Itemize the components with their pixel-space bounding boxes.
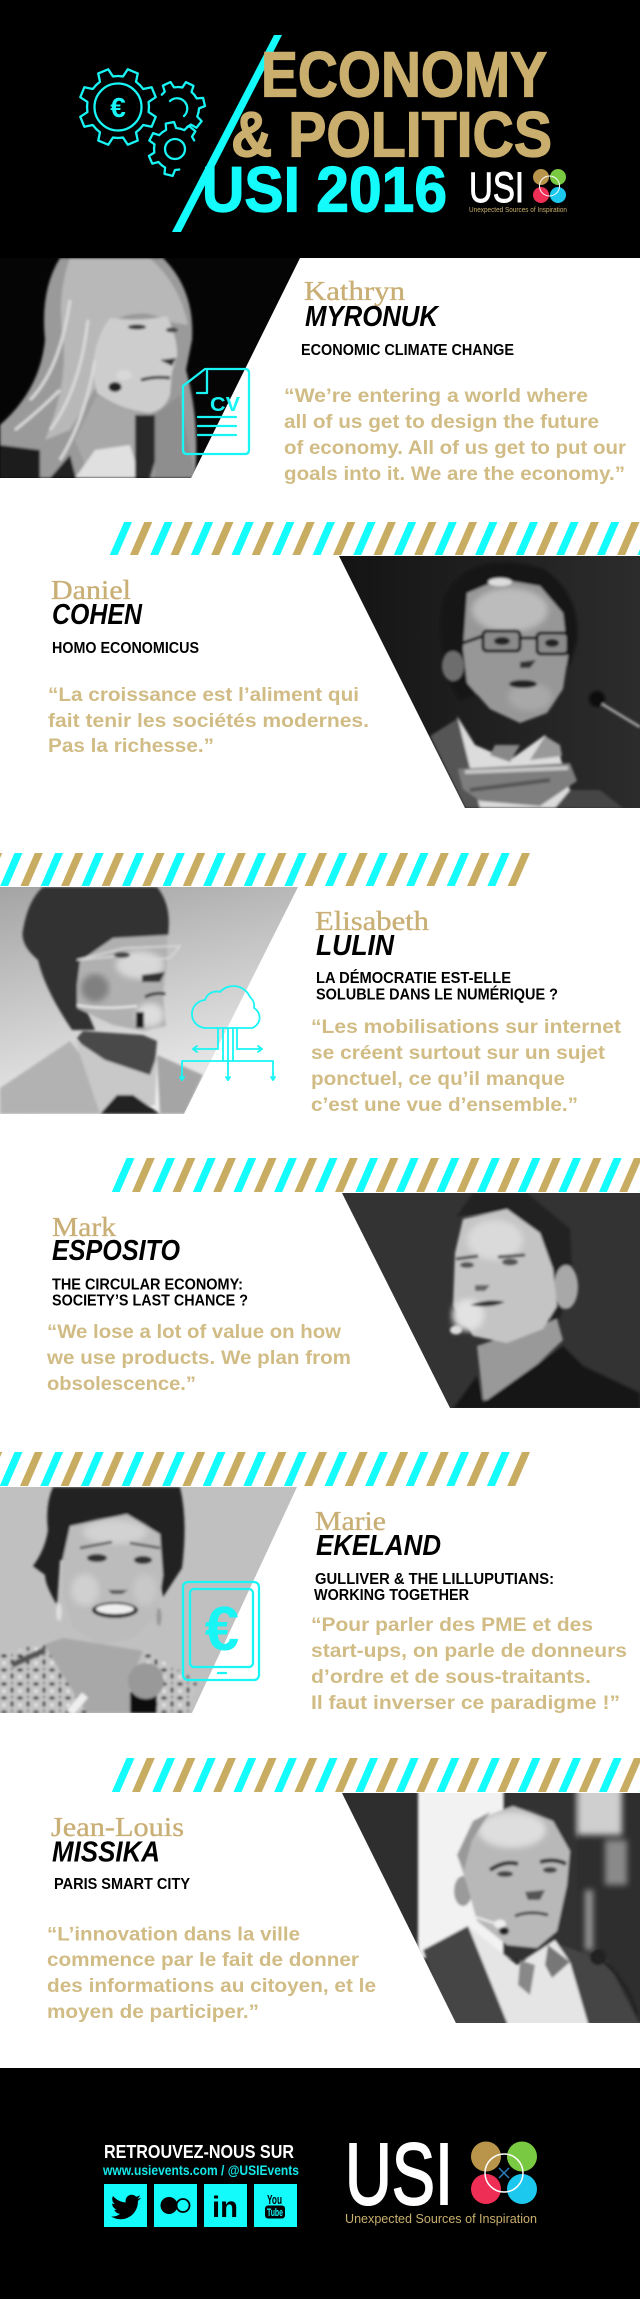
- footer heading: RETROUVEZ-NOUS SUR: [104, 2142, 294, 2162]
- quote: [311, 1016, 622, 1116]
- talk title: [314, 1571, 554, 1604]
- talk title: WORKING TOGETHER: [314, 1587, 469, 1604]
- title: USI 2016: USI 2016: [202, 154, 447, 226]
- footer links: www.usievents.com / @USIEvents: [102, 2162, 299, 2178]
- name: Elisabeth: Elisabeth: [315, 906, 430, 936]
- icon: flickr: [154, 2184, 197, 2227]
- surname: Lulin: LULIN: [316, 930, 395, 962]
- stripes band 4: [0, 1452, 531, 1486]
- quote: “Pour parler des PME et des: [311, 1614, 593, 1636]
- panel: Daniel Cohen: [48, 556, 640, 808]
- talk title: ECONOMIC CLIMATE CHANGE: [301, 342, 514, 359]
- icon: CV document: CV: [210, 394, 241, 416]
- quote: [311, 1614, 627, 1714]
- quote: fait tenir les sociétés modernes.: [48, 710, 369, 732]
- icon: linkedin: in: [212, 2191, 238, 2224]
- stripes band 2: [0, 853, 531, 886]
- quote: “Les mobilisations sur internet: [311, 1016, 622, 1038]
- quote: we use products. We plan from: [46, 1347, 351, 1369]
- stripes band 5: [112, 1758, 640, 1792]
- surname: Myronuk: MYRONUK: [305, 301, 440, 333]
- panel: header: [0, 0, 640, 258]
- panel: Kathryn Myronuk: [0, 258, 626, 485]
- quote: “La croissance est l’aliment qui: [48, 684, 359, 706]
- photo: Marie Ekeland: [0, 1487, 300, 1713]
- talk title: THE CIRCULAR ECONOMY:: [52, 1276, 243, 1294]
- quote: d’ordre et de sous-traitants.: [311, 1666, 591, 1688]
- surname: Esposito: ESPOSITO: [52, 1235, 180, 1267]
- surname: Cohen: COHEN: [52, 599, 143, 631]
- logo: USI large: USI: [345, 2126, 453, 2223]
- talk title: SOLUBLE DANS LE NUMÉRIQUE ?: [316, 984, 558, 1003]
- icon: youtube: [254, 2184, 297, 2227]
- icon: CV document: [183, 369, 249, 454]
- icon: gears with euro: [78, 67, 206, 177]
- stripes band 3: [112, 1158, 640, 1192]
- icon: youtube: Tube: [267, 2207, 283, 2219]
- talk title: PARIS SMART CITY: [54, 1876, 190, 1893]
- quote: [48, 684, 369, 757]
- quote: “We’re entering a world where: [284, 385, 588, 407]
- icon: linkedin: [204, 2184, 247, 2227]
- panel: Mark Esposito: [46, 1193, 640, 1409]
- talk title: GULLIVER & THE LILLUPUTIANS:: [315, 1571, 554, 1588]
- title: economy: ECONOMY: [261, 38, 547, 110]
- name: Jean-Louis: Jean-Louis: [51, 1812, 184, 1842]
- quote: ponctuel, ce qu’il manque: [311, 1068, 565, 1090]
- photo: Jean-Louis Missika: [342, 1785, 640, 2030]
- photo: Mark Esposito: [342, 1193, 640, 1409]
- icon: tablet with euro: [183, 1582, 259, 1680]
- quote: se créent surtout sur un sujet: [311, 1042, 606, 1064]
- logo: USI small: Unexpected Sources of Inspiration: [469, 207, 567, 214]
- icon: cloud network: [180, 986, 275, 1080]
- quote: c’est une vue d’ensemble.”: [311, 1094, 578, 1116]
- quote: Pas la richesse.”: [48, 735, 214, 757]
- icon: tablet with euro: €: [205, 1595, 239, 1664]
- quote: start-ups, on parle de donneurs: [311, 1640, 627, 1662]
- title: and politics: & POLITICS: [231, 98, 552, 170]
- panel: Jean-Louis Missika: [47, 1785, 640, 2030]
- quote: all of us get to design the future: [284, 411, 599, 433]
- quote: [284, 385, 626, 485]
- quote: [47, 1924, 376, 2023]
- name: Marie: Marie: [315, 1506, 386, 1536]
- icon: gears with euro: €: [110, 92, 126, 123]
- quote: des informations au citoyen, et le: [47, 1975, 376, 1997]
- surname: Missika: MISSIKA: [52, 1836, 160, 1868]
- talk title: LA DÉMOCRATIE EST-ELLE: [316, 968, 511, 987]
- stripes band 1: [110, 522, 640, 555]
- talk title: [52, 1276, 248, 1310]
- name: Mark: Mark: [52, 1212, 117, 1242]
- quote: [46, 1321, 351, 1395]
- quote: of economy. All of us get to put our: [284, 437, 626, 459]
- quote: “We lose a lot of value on how: [47, 1321, 342, 1343]
- photo: Elisabeth Lulin: [0, 887, 300, 1114]
- panel: Elisabeth Lulin: [0, 887, 622, 1116]
- talk title: HOMO ECONOMICUS: [52, 640, 199, 657]
- photo: Kathryn Myronuk: [0, 258, 300, 478]
- icon: twitter: [104, 2184, 147, 2227]
- quote: obsolescence.”: [47, 1373, 196, 1395]
- quote: moyen de participer.”: [47, 2001, 259, 2023]
- icon: youtube: You: [267, 2192, 282, 2207]
- name: Kathryn: Kathryn: [304, 276, 406, 306]
- logo: USI small: USI: [469, 164, 524, 212]
- quote: “L’innovation dans la ville: [47, 1924, 300, 1946]
- logo: USI large: Unexpected Sources of Inspiration: [345, 2211, 537, 2226]
- quote: goals into it. We are the economy.”: [284, 463, 625, 485]
- diagonal slash: [172, 35, 282, 232]
- panel: Marie Ekeland: [0, 1487, 627, 1714]
- talk title: SOCIETY’S LAST CHANCE ?: [52, 1293, 248, 1310]
- panel: footer: [0, 2068, 640, 2299]
- photo: Daniel Cohen: [339, 556, 640, 808]
- name: Daniel: Daniel: [51, 575, 131, 605]
- surname: Ekeland: EKELAND: [316, 1530, 441, 1562]
- quote: Il faut inverser ce paradigme !”: [311, 1692, 620, 1714]
- talk title: [316, 968, 558, 1003]
- quote: commence par le fait de donner: [47, 1949, 359, 1971]
